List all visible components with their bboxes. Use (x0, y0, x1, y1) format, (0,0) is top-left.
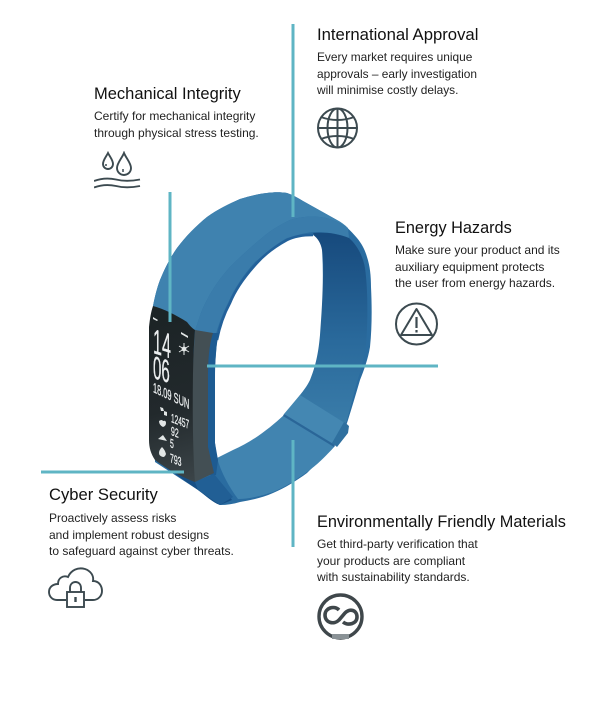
callout line: cyber security (41, 470, 184, 474)
lining beside device (208, 333, 219, 475)
wristband (153, 192, 372, 505)
icon: globe (317, 108, 358, 148)
text block: the user from energy hazards. (395, 276, 555, 290)
panel: international approval (317, 25, 478, 148)
heading: International Approval (317, 25, 478, 44)
panel: environmentally friendly materials (317, 513, 566, 640)
screen clock: 92 (171, 425, 179, 442)
screen clock: 06 (153, 350, 170, 391)
lower band face (217, 415, 335, 499)
screen icons (153, 317, 189, 457)
text block: Certify for mechanical integrity (94, 109, 255, 123)
panel: energy hazards (395, 219, 560, 346)
callout line: environmentally friendly materials (292, 440, 294, 547)
inner edge line (217, 235, 313, 340)
screen clock: 5 (170, 437, 174, 452)
panel: cyber security (48, 485, 234, 608)
text block: with sustainability standards. (317, 570, 470, 584)
band bevel (195, 217, 349, 334)
screen clock: 793 (170, 452, 182, 470)
device underside dark (155, 460, 232, 505)
callout line: international approval (292, 24, 294, 217)
heading: Mechanical Integrity (94, 85, 241, 103)
text block (49, 511, 234, 558)
text block: Proactively assess risks (49, 511, 176, 525)
screen clock: 14 (153, 321, 171, 366)
text block: through physical stress testing. (94, 126, 259, 140)
callout line: energy hazards (207, 364, 438, 368)
screen clock: 18.09 SUN (153, 381, 189, 413)
panel: mechanical integrity (94, 85, 259, 188)
band inner right face (296, 233, 367, 442)
icon: warning triangle (395, 302, 438, 346)
callout line: mechanical integrity (168, 192, 172, 322)
wrist opening (215, 235, 323, 458)
band outer silhouette (153, 192, 372, 505)
heading: Energy Hazards (395, 219, 512, 237)
icon: water drops and waves (94, 151, 140, 188)
text block: Every market requires unique (317, 50, 472, 64)
text block (395, 243, 560, 290)
text block: to safeguard against cyber threats. (49, 544, 234, 558)
buckle loop (284, 395, 348, 445)
text block: your products are compliant (317, 554, 465, 568)
text block: will minimise costly delays. (317, 83, 458, 97)
text block: approvals – early investigation (317, 66, 477, 80)
icon: cloud with padlock (48, 567, 103, 608)
text block: auxiliary equipment protects (395, 260, 544, 274)
text block (317, 50, 477, 97)
text block (94, 109, 259, 140)
screen clock (153, 321, 189, 470)
screen clock: 12457 (171, 412, 189, 433)
heading: Cyber Security (49, 485, 158, 504)
icon: sustainability loop seal (317, 593, 364, 640)
device screen (149, 306, 195, 482)
device side panel (192, 330, 214, 482)
text block: and implement robust designs (49, 528, 209, 542)
text block (317, 537, 478, 584)
heading: Environmentally Friendly Materials (317, 513, 566, 531)
band top face (153, 192, 348, 330)
text block: Get third-party verification that (317, 537, 478, 551)
device underside mid (195, 474, 233, 505)
text block: Make sure your product and its (395, 243, 560, 257)
